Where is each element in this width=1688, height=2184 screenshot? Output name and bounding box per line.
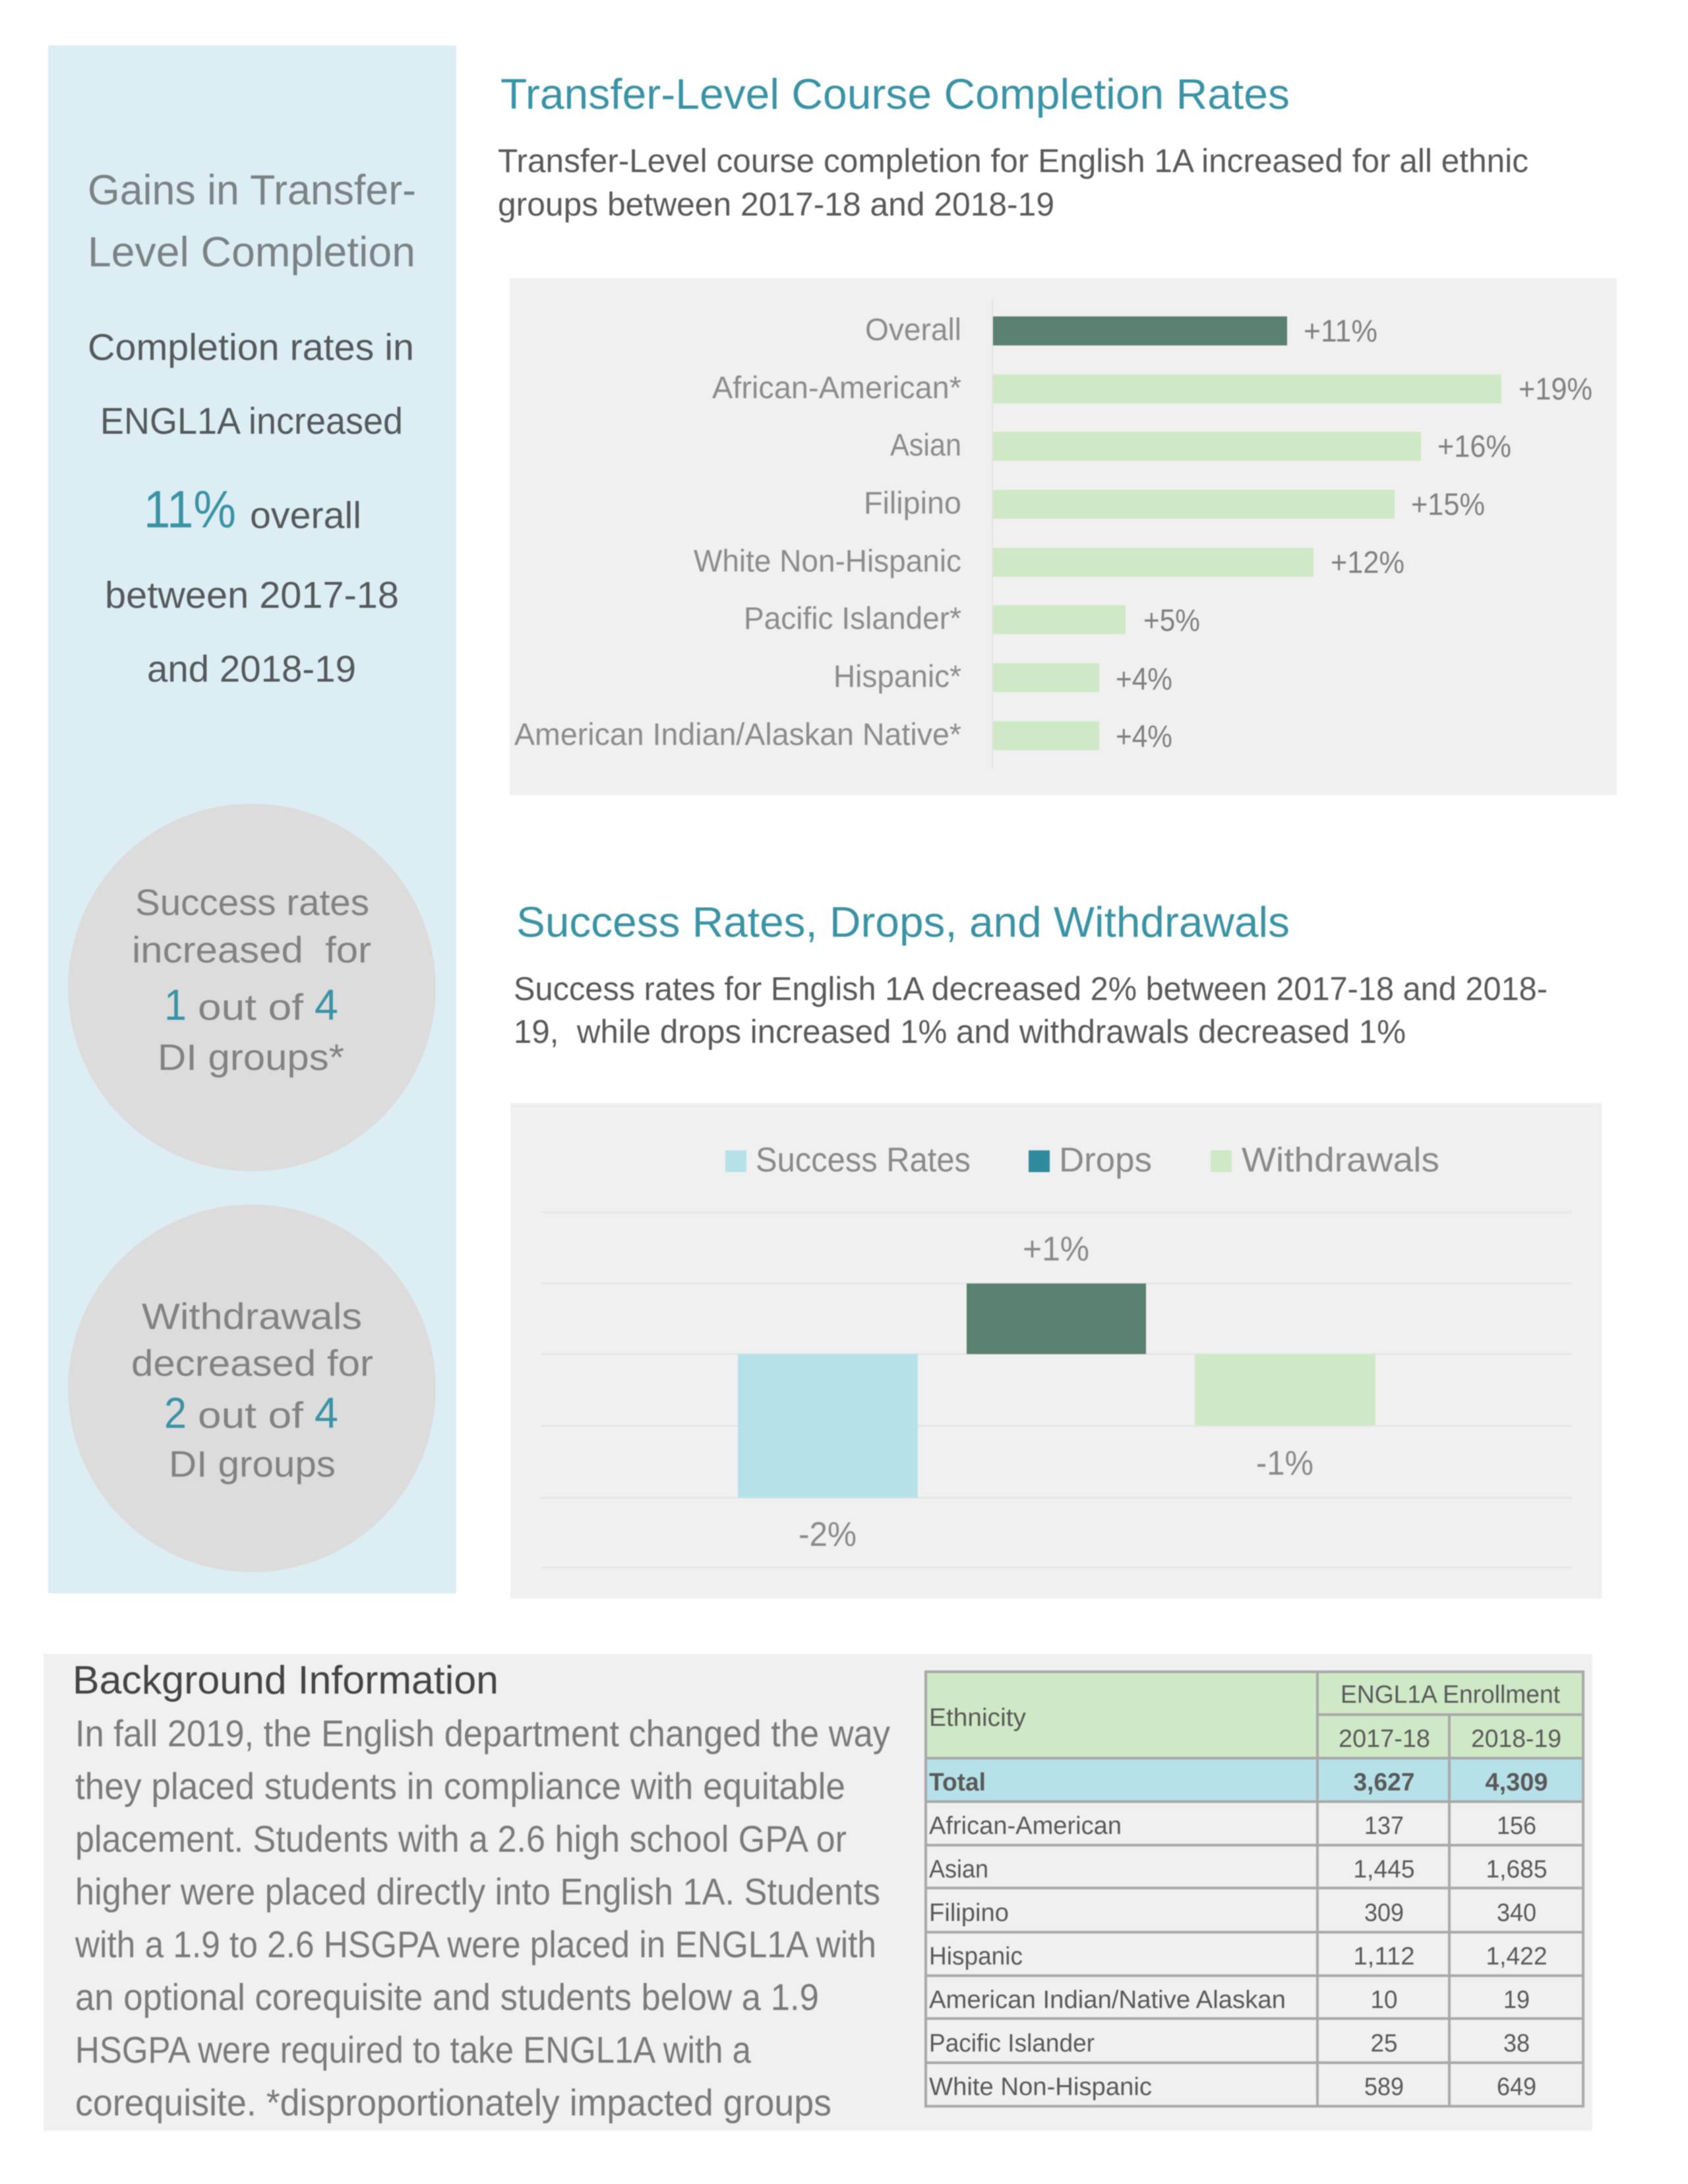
- table row: asian: 1,685: [1486, 1856, 1547, 1883]
- callout: withdrawals circle: 2: [164, 1388, 187, 1437]
- table row: filipino: [929, 1899, 1536, 1927]
- table row: american indian/native alaskan: American Indian/Native Alaskan: [929, 1986, 1286, 2014]
- text block: transfer-level description: [498, 142, 1528, 223]
- table row: white non-hispanic: 649: [1497, 2073, 1536, 2101]
- text block: transfer-level description: Transfer-Level course completion for English 1A increased for all ethnic: [498, 142, 1528, 179]
- legend: Success Rates: [756, 1141, 971, 1179]
- table row: asian: Asian: [929, 1856, 988, 1883]
- heading: gains in transfer-level completion: Gains in Transfer-: [88, 166, 416, 214]
- text block: transfer-level description: groups between 2017-18 and 2018-19: [498, 186, 1054, 223]
- text block: background paragraph: placement. Students with a 2.6 high school GPA or: [75, 1818, 847, 1860]
- callout: success rates circle: increased for: [132, 929, 371, 970]
- table row: hispanic: 1,422: [1486, 1943, 1547, 1970]
- table row: pacific islander: 25: [1370, 2030, 1398, 2057]
- legend: Drops: [1059, 1141, 1152, 1179]
- heading: transfer-level course completion rates: Transfer-Level Course Completion Rates: [500, 70, 1290, 118]
- table row: african-american: African-American: [929, 1812, 1122, 1840]
- callout: success rates circle: [68, 804, 436, 1171]
- row: white non-hispanic: [694, 543, 1404, 579]
- table row: total: Total: [929, 1769, 986, 1796]
- table row: african-american: [929, 1812, 1536, 1840]
- legend: [725, 1141, 1439, 1179]
- row: pacific islander: [744, 601, 1200, 637]
- callout: withdrawals circle: [68, 1204, 436, 1572]
- table row: white non-hispanic: [929, 2073, 1536, 2101]
- row: filipino: +15%: [1411, 487, 1485, 521]
- panel: background information: [44, 1654, 1592, 2131]
- callout: success rates circle: Success rates: [135, 881, 369, 923]
- row: asian: +16%: [1437, 428, 1511, 463]
- text block: background paragraph: an optional corequisite and students below a 1.9: [75, 1976, 819, 2019]
- row: filipino: [864, 485, 1485, 521]
- table row: total: [929, 1769, 1548, 1796]
- table header: 2017-18: [1339, 1725, 1430, 1753]
- table row: asian: 1,445: [1353, 1856, 1415, 1883]
- heading: gains in transfer-level completion: [88, 166, 416, 276]
- text block: completion rates summary: [88, 326, 414, 690]
- table row: pacific islander: Pacific Islander: [929, 2030, 1095, 2057]
- heading: background information: Background Information: [73, 1658, 498, 1702]
- table row: pacific islander: 38: [1503, 2030, 1530, 2057]
- text block: completion rates summary: and 2018-19: [147, 648, 356, 690]
- bar: success rates -2%: [738, 1354, 918, 1554]
- bar: drops +1%: [967, 1230, 1146, 1354]
- text block: completion rates summary: between 2017-18: [105, 574, 399, 616]
- text block: background paragraph: they placed students in compliance with equitable: [75, 1765, 845, 1808]
- callout: success rates circle: DI groups*: [158, 1036, 344, 1078]
- callout: withdrawals circle: out of: [198, 1394, 304, 1436]
- legend: Withdrawals: [1242, 1141, 1439, 1179]
- table row: filipino: 340: [1497, 1899, 1536, 1927]
- row: overall: [865, 312, 1377, 348]
- row: american indian/alaskan native: +4%: [1116, 719, 1172, 753]
- table row: hispanic: 1,112: [1353, 1943, 1415, 1970]
- row: pacific islander: Pacific Islander*: [744, 601, 961, 635]
- bar: withdrawals -1%: [1195, 1354, 1375, 1483]
- table row: filipino: Filipino: [929, 1899, 1009, 1927]
- table row: pacific islander: [929, 2030, 1530, 2057]
- callout: withdrawals circle: Withdrawals: [142, 1295, 362, 1337]
- callout: success rates circle: out of: [198, 986, 304, 1028]
- table row: american indian/native alaskan: 10: [1370, 1986, 1398, 2014]
- row: african-american: African-American*: [712, 370, 961, 405]
- table header: Ethnicity: [929, 1704, 1026, 1732]
- text block: background paragraph: with a 1.9 to 2.6 HSGPA were placed in ENGL1A with: [75, 1924, 876, 1966]
- bar: drops +1%: +1%: [1023, 1230, 1089, 1268]
- row: hispanic: Hispanic*: [833, 659, 961, 694]
- heading: success rates, drops, and withdrawals: Success Rates, Drops, and Withdrawals: [516, 898, 1290, 946]
- bar: withdrawals -1%: -1%: [1256, 1444, 1313, 1483]
- row: white non-hispanic: White Non-Hispanic: [694, 543, 961, 578]
- table row: white non-hispanic: 589: [1364, 2073, 1404, 2101]
- text block: success rates description: Success rates for English 1A decreased 2% between 2017-18 and 2018-: [514, 970, 1548, 1007]
- text block: completion rates summary: 11%: [144, 480, 236, 539]
- table header: ENGL1A Enrollment: [1341, 1681, 1560, 1709]
- table row: african-american: 137: [1364, 1812, 1404, 1840]
- table header: [929, 1681, 1561, 1753]
- heading: gains in transfer-level completion: Level Completion: [88, 228, 415, 276]
- table row: american indian/native alaskan: [929, 1986, 1530, 2014]
- callout: success rates circle: 1: [164, 980, 187, 1029]
- row: african-american: +19%: [1519, 371, 1592, 406]
- bar: success rates -2%: -2%: [799, 1516, 857, 1554]
- table row: white non-hispanic: White Non-Hispanic: [929, 2073, 1152, 2101]
- row: american indian/alaskan native: American Indian/Alaskan Native*: [514, 717, 961, 752]
- row: asian: [890, 427, 1511, 463]
- text block: completion rates summary: overall: [250, 494, 361, 537]
- text block: background paragraph: HSGPA were required to take ENGL1A with a: [75, 2029, 751, 2071]
- callout: withdrawals circle: 4: [315, 1388, 338, 1437]
- row: hispanic: [833, 659, 1172, 696]
- row: filipino: Filipino: [864, 485, 961, 520]
- table row: total: 3,627: [1353, 1769, 1415, 1796]
- table row: filipino: 309: [1364, 1899, 1404, 1927]
- table row: african-american: 156: [1497, 1812, 1536, 1840]
- row: pacific islander: +5%: [1143, 603, 1200, 637]
- text block: completion rates summary: ENGL1A increased: [100, 400, 403, 442]
- text block: background paragraph: corequisite. *disproportionately impacted groups: [75, 2082, 831, 2124]
- table header: 2018-19: [1471, 1725, 1561, 1753]
- table row: total: 4,309: [1485, 1769, 1548, 1796]
- bar chart: success, drops, withdrawals change: [510, 1103, 1602, 1599]
- text block: background paragraph: In fall 2019, the English department changed the way: [75, 1713, 890, 1755]
- row: overall: +11%: [1304, 313, 1377, 348]
- bar chart: completion rate gains by ethnicity: [510, 278, 1617, 795]
- panel: left summary sidebar: [48, 45, 456, 1593]
- text block: success rates description: 19, while drops increased 1% and withdrawals decreased 1%: [514, 1013, 1406, 1050]
- callout: withdrawals circle: decreased for: [131, 1342, 373, 1384]
- row: african-american: [712, 370, 1592, 406]
- row: asian: Asian: [890, 427, 961, 462]
- row: hispanic: +4%: [1116, 661, 1172, 696]
- callout: success rates circle: 4: [315, 980, 338, 1029]
- text block: background paragraph: [75, 1713, 890, 2124]
- text block: success rates description: [514, 970, 1548, 1050]
- row: white non-hispanic: +12%: [1331, 545, 1404, 579]
- callout: withdrawals circle: DI groups: [169, 1443, 336, 1485]
- table row: american indian/native alaskan: 19: [1503, 1986, 1530, 2014]
- table row: asian: [929, 1856, 1547, 1883]
- text block: background paragraph: higher were placed directly into English 1A. Students: [75, 1871, 880, 1913]
- text block: completion rates summary: Completion rates in: [88, 326, 414, 369]
- row: american indian/alaskan native: [514, 717, 1172, 753]
- table row: hispanic: [929, 1943, 1547, 1970]
- table: ENGL1A enrollment by ethnicity: [926, 1672, 1583, 2106]
- table row: hispanic: Hispanic: [929, 1943, 1023, 1970]
- row: overall: Overall: [865, 312, 961, 347]
